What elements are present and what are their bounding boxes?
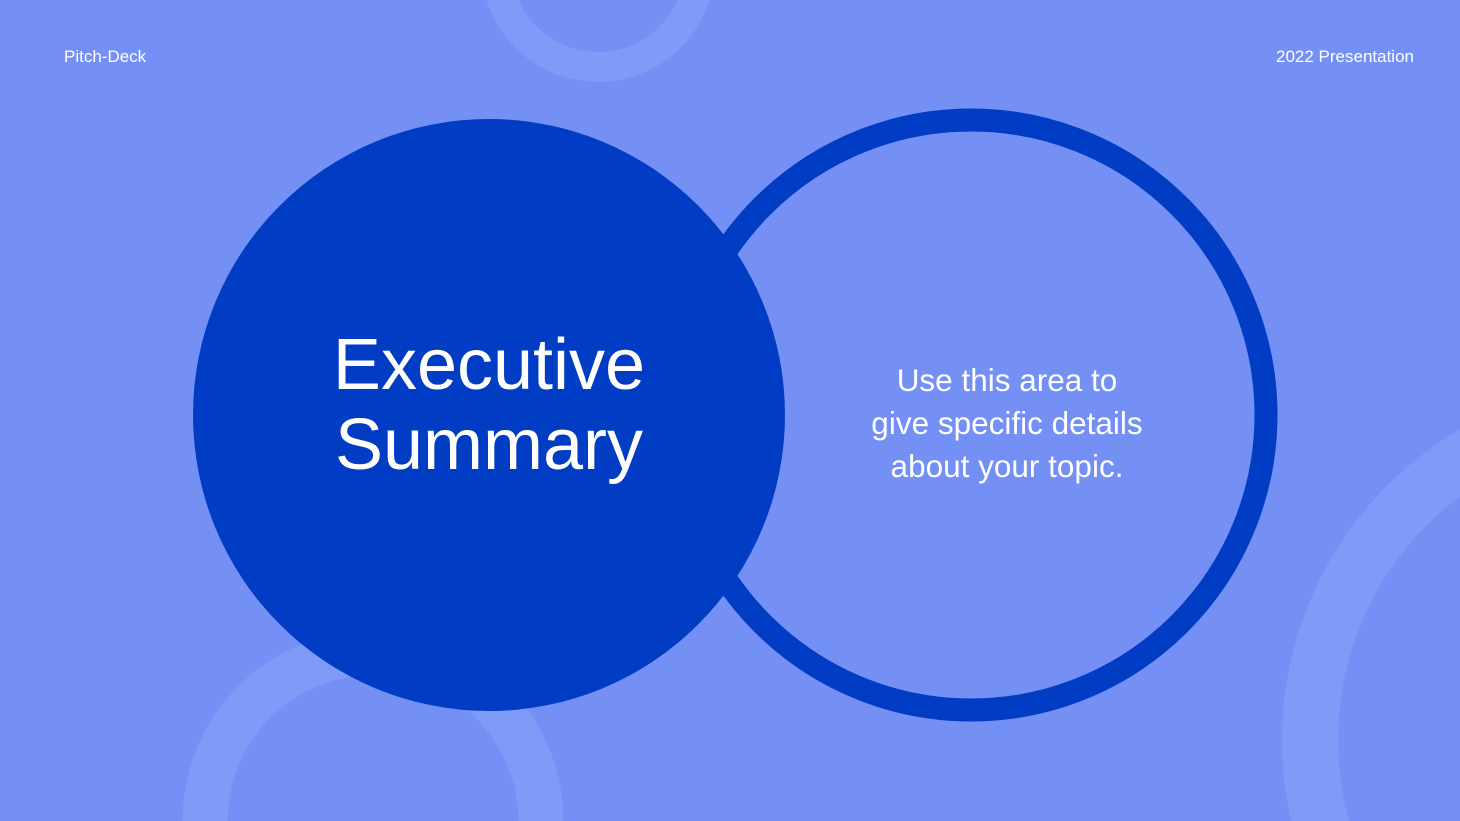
decorative ring top [486,0,710,82]
body text: Use this area to [897,362,1117,398]
title [333,325,645,485]
header right: 2022 Presentation [1276,47,1414,66]
decorative ring right [1282,429,1460,821]
title: Summary [335,405,643,485]
body text: give specific details [871,405,1143,441]
header left: Pitch-Deck [64,47,146,66]
decorative ring bottom left [182,631,564,821]
body text: about your topic. [891,448,1123,484]
outlined circle [676,120,1266,710]
body text [871,362,1143,484]
filled circle [193,119,785,711]
title: Executive [333,325,645,405]
